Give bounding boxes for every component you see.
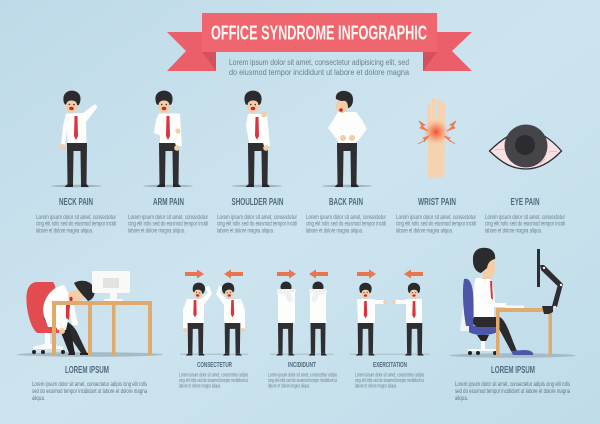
banner right tail <box>423 32 472 71</box>
text: incididunt: Lorem ipsum dolor sit amet, consectetur adipis <box>268 372 337 378</box>
chair <box>26 282 60 333</box>
chair <box>460 306 470 331</box>
text: shoulder pain: Lorem ipsum dolor sit amet, consectetur <box>217 215 297 221</box>
text: arm pain: Lorem ipsum dolor sit amet, consectetur <box>128 215 208 221</box>
text: arm pain: labore et dolore magna aliqua. <box>128 228 185 234</box>
text: neck pain: Lorem ipsum dolor sit amet, consectetur <box>36 215 116 221</box>
text: neck pain: labore et dolore magna aliqua. <box>36 228 93 234</box>
text: lorem ipsum left: Lorem ipsum dolor sit amet, consectetur adipis cing elit rolls <box>32 381 147 388</box>
desk <box>496 308 553 355</box>
worker <box>473 317 517 351</box>
text: lorem ipsum left: aliqua. <box>32 395 45 402</box>
text: arm pain: cing elit rolls sed do eiusmod tempor incidi <box>128 222 208 228</box>
text: back pain <box>306 215 386 234</box>
heading: shoulder pain: SHOULDER PAIN <box>232 197 284 208</box>
arrow pair 2 <box>277 270 328 278</box>
heading: consectetur: CONSECTETUR <box>197 360 232 369</box>
text: incididunt: labore et dolore magna aliqua. <box>268 384 310 390</box>
text: back pain: labore et dolore magna aliqua. <box>306 228 363 234</box>
text: consectetur: Lorem ipsum dolor sit amet, consectetur adipis <box>179 372 248 378</box>
stretch figure: head tilt <box>180 282 248 356</box>
arrow pair 1 <box>185 270 243 278</box>
text: consectetur <box>179 372 248 390</box>
text: lorem ipsum right <box>455 381 570 402</box>
intro text <box>229 58 409 77</box>
text: exercitation: labore et dolore magna aliqua. <box>355 384 397 390</box>
text: back pain: cing elit rolls sed do eiusmod tempor incidi <box>306 222 386 228</box>
stretch figure: arm pull across <box>350 283 430 356</box>
figure: back pain <box>322 91 372 187</box>
icon: red eye <box>490 124 562 169</box>
text: incididunt <box>268 372 337 390</box>
banner left tail <box>167 32 216 71</box>
text: incididunt: cing elit rolls sed do eiusmod tempor incididunt ut <box>268 378 337 384</box>
figure: neck pain <box>51 90 102 187</box>
icon: wrist pain <box>418 98 456 178</box>
heading: lorem ipsum left: LOREM IPSUM <box>65 365 109 376</box>
text: exercitation: cing elit rolls sed do eiusmod tempor incididunt ut <box>355 378 424 384</box>
text: shoulder pain: cing elit rolls sed do eiusmod tempor incidi <box>217 222 297 228</box>
arrow pair 3 <box>357 270 423 278</box>
scene: exhausted worker at desk <box>17 271 163 357</box>
heading: lorem ipsum right: LOREM IPSUM <box>491 365 535 376</box>
figure: shoulder pain <box>232 91 282 187</box>
stretch figure: arm across back view <box>270 282 334 356</box>
worker <box>44 317 87 353</box>
text: lorem ipsum right: aliqua. <box>455 395 468 402</box>
text: wrist pain: cing elit rolls sed do eiusmod tempor incidi <box>396 222 476 228</box>
scene: correct sitting posture <box>450 248 576 358</box>
intro text: do eiusmod tempor incididunt ut labore et dolore magna <box>229 68 409 77</box>
text: exercitation <box>355 372 424 390</box>
figure: arm pain <box>143 91 193 187</box>
text: consectetur: labore et dolore magna aliqua. <box>179 384 221 390</box>
heading: wrist pain: WRIST PAIN <box>418 197 456 208</box>
heading: exercitation: EXERCITATION <box>373 360 407 369</box>
text: wrist pain <box>396 215 476 234</box>
monitor and arm <box>537 249 540 287</box>
intro text: Lorem ipsum dolor sit amet, consectetur adipisicing elit, sed <box>229 58 409 67</box>
text: consectetur: cing elit rolls sed do eiusmod tempor incididunt ut <box>179 378 248 384</box>
text: shoulder pain: labore et dolore magna aliqua. <box>217 228 274 234</box>
text: exercitation: Lorem ipsum dolor sit amet, consectetur adipis <box>355 372 424 378</box>
text: neck pain <box>36 215 116 234</box>
text: lorem ipsum left: sed do eiusmod tempor incididunt ut labore et dolore magna <box>32 388 147 395</box>
text: eye pain: cing elit rolls sed do eiusmod tempor incidi <box>485 222 565 228</box>
title: OFFICE SYNDROME INFOGRAPHIC <box>211 22 427 44</box>
heading: arm pain: ARM PAIN <box>153 197 184 208</box>
text: wrist pain: Lorem ipsum dolor sit amet, consectetur <box>396 215 476 221</box>
text: eye pain <box>485 215 565 234</box>
text: arm pain <box>128 215 208 234</box>
text: eye pain: Lorem ipsum dolor sit amet, consectetur <box>485 215 565 221</box>
text: shoulder pain <box>217 215 297 234</box>
text: wrist pain: labore et dolore magna aliqua. <box>396 228 453 234</box>
heading: incididunt: INCIDIDUNT <box>288 360 316 369</box>
text: lorem ipsum left <box>32 381 147 402</box>
title banner <box>167 13 472 71</box>
text: eye pain: labore et dolore magna aliqua. <box>485 228 542 234</box>
monitor <box>92 271 130 293</box>
text: neck pain: cing elit rolls sed do eiusmod tempor incidi <box>36 222 116 228</box>
heading: back pain: BACK PAIN <box>329 197 363 208</box>
text: back pain: Lorem ipsum dolor sit amet, consectetur <box>306 215 386 221</box>
desk <box>52 301 152 355</box>
heading: eye pain: EYE PAIN <box>510 197 540 208</box>
heading: neck pain: NECK PAIN <box>59 197 93 208</box>
